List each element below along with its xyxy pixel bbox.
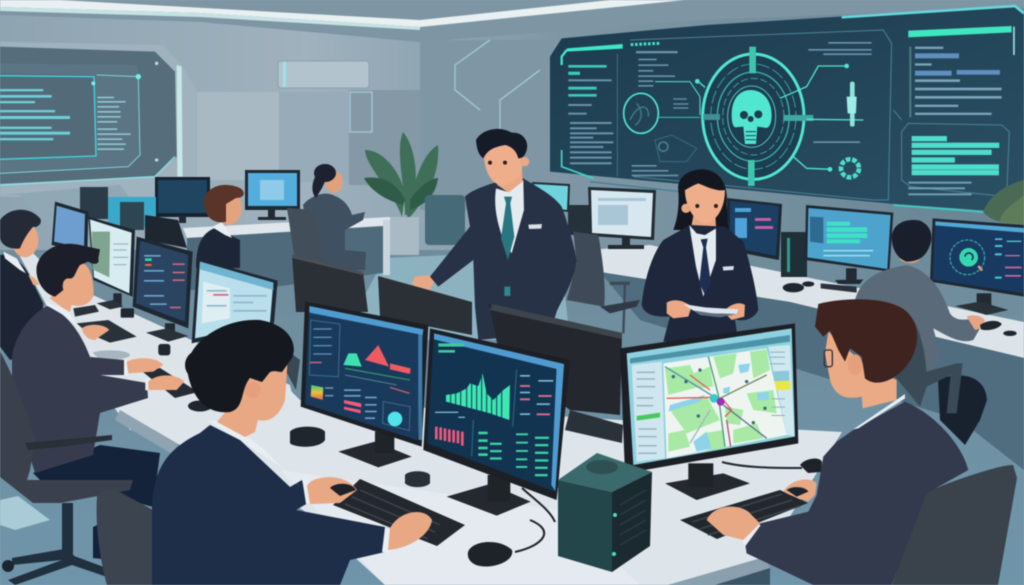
left scribble column <box>568 65 607 97</box>
small desk devices <box>290 427 430 487</box>
monitor: dark dashboard behind woman <box>727 198 782 260</box>
monitor: blue bars <box>783 205 893 293</box>
trousers of left front worker <box>33 445 160 507</box>
person: trousers of back view worker <box>938 375 987 445</box>
keyboard behind middle monitor <box>565 410 623 443</box>
panel: left wall display <box>0 42 197 197</box>
chair: foreground right <box>892 465 1017 585</box>
cable at map monitor <box>722 462 802 468</box>
person: back worker with ponytail <box>287 164 366 270</box>
monitor: white spreadsheet <box>588 187 656 249</box>
monitor: dashboard with area chart <box>423 328 570 516</box>
tower: back right <box>781 232 807 277</box>
person: far left worker <box>0 210 43 360</box>
keyboard: left front worker <box>143 368 198 398</box>
left workstation desk <box>0 220 300 430</box>
hands: left front worker <box>124 358 184 390</box>
plant: right corner <box>983 180 1024 225</box>
head: foreground right worker <box>815 299 917 408</box>
person: standing woman with paper <box>642 169 758 342</box>
keyboard: foreground centre <box>333 479 465 546</box>
person: foreground centre worker <box>152 320 432 585</box>
floor light patch, centre <box>340 250 570 340</box>
right back desk <box>590 245 1024 470</box>
left row monitors <box>52 202 278 355</box>
plant: back centre <box>364 132 438 255</box>
right mouse <box>800 458 822 473</box>
centre wall panels <box>197 40 555 210</box>
cables from tower <box>515 488 555 552</box>
main foreground desk <box>85 345 842 585</box>
back left monitors <box>80 170 300 248</box>
monitor: city map dashboard <box>620 323 798 500</box>
back left bench and planter <box>0 185 465 290</box>
monitor: cyber radar <box>930 218 1024 315</box>
keyboards on left desk <box>73 305 137 360</box>
person: back worker with brown hair <box>196 185 244 268</box>
right info column <box>908 26 1012 37</box>
target ring with skull <box>703 47 813 186</box>
mouse: left desk <box>188 400 212 412</box>
person: standing manager <box>412 129 577 340</box>
chair: left front <box>0 352 133 585</box>
chair behind manager <box>567 232 640 333</box>
side gauges and connectors <box>624 66 863 177</box>
keyboard: foreground right <box>680 490 808 539</box>
floor <box>0 250 1024 585</box>
monitor: dashboard with triangle chart <box>301 302 428 467</box>
monitor and tower behind centre man <box>532 182 590 235</box>
person: foreground right worker <box>707 394 968 585</box>
mini tower <box>558 453 652 572</box>
person: left front worker <box>12 244 148 473</box>
air conditioner <box>278 61 369 88</box>
chair <box>870 310 963 413</box>
chair: foreground centre <box>97 490 205 585</box>
panel: main threat display wall <box>550 5 1024 213</box>
mouse: foreground <box>468 542 512 567</box>
floor patches, left foreground <box>0 496 50 530</box>
person: back view worker in grey <box>855 220 1017 413</box>
ceiling with light strip <box>0 0 1024 42</box>
back view monitors centre <box>280 255 622 415</box>
